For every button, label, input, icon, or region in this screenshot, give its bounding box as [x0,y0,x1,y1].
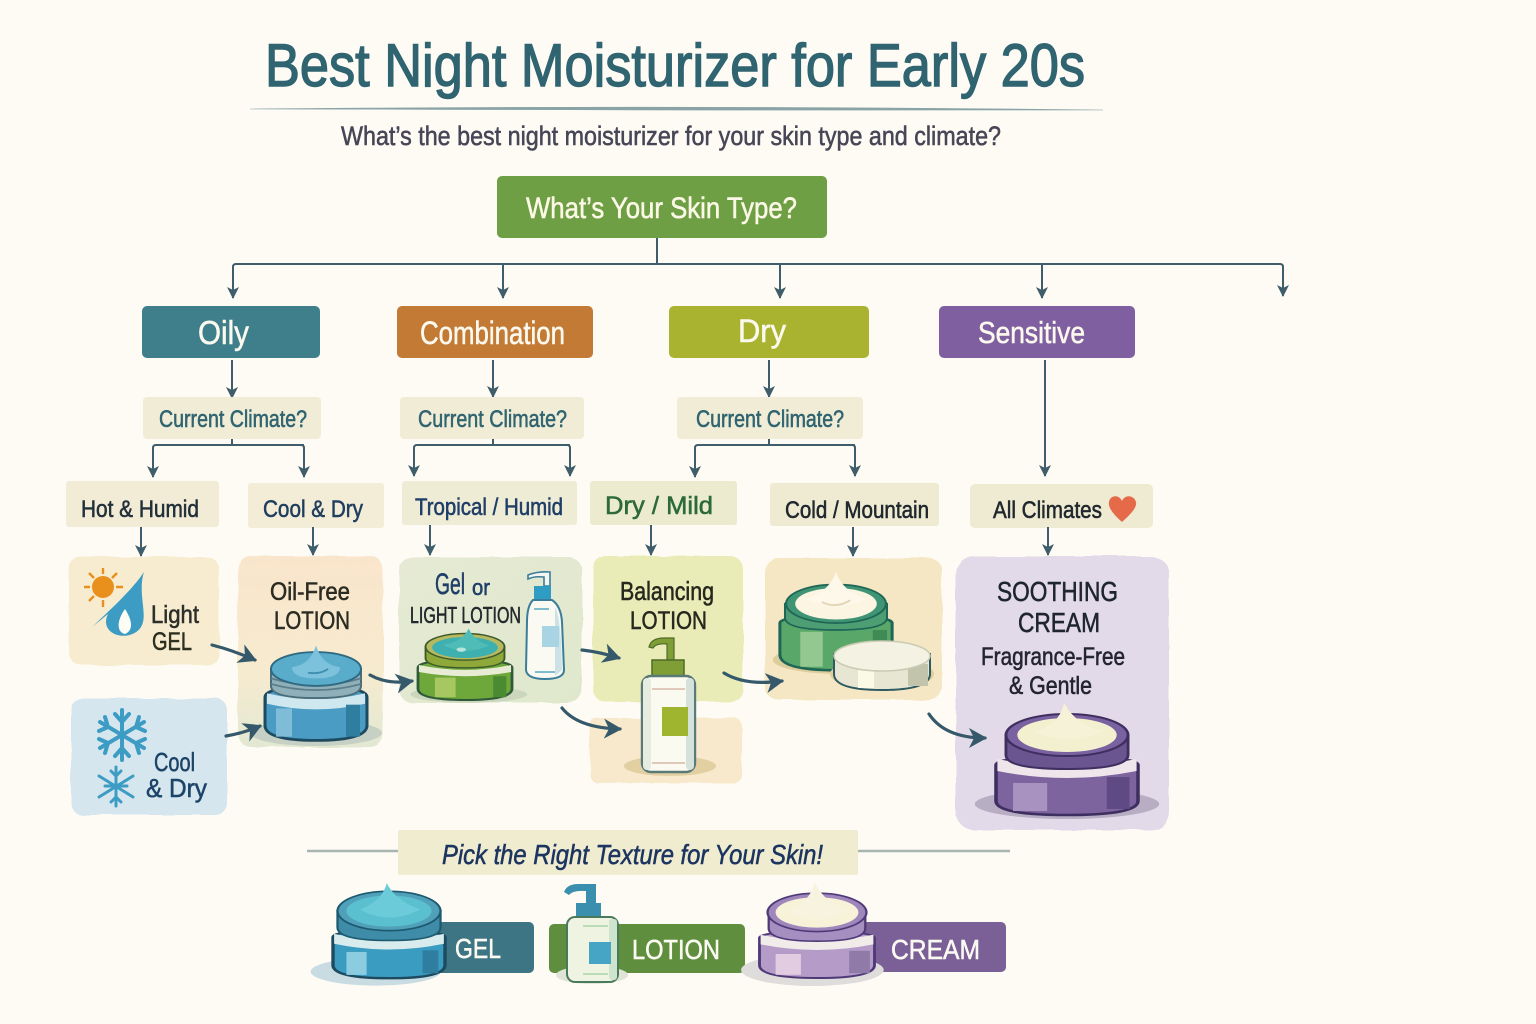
climate: All Climates [970,484,1153,528]
climate: Dry / Mild: Dry / Mild [605,492,713,520]
icon: large snowflake [99,710,145,760]
skin type: Sensitive: Sensitive [978,315,1085,350]
panel: Light Gel: Light [151,601,199,629]
texture section heading: Pick the Right Texture for Your Skin! [442,839,823,870]
panel: Gel or Light Lotion: Gel [435,568,465,601]
icon: sun [84,568,123,607]
climate: Tropical / Humid: Tropical / Humid [415,494,563,521]
panel: Soothing Cream [956,556,1169,830]
icon: purple jar [975,703,1159,819]
icon: green cream jar [773,572,899,674]
panel: Gel or Light Lotion: LIGHT LOTION [410,602,521,628]
root question box [497,176,827,238]
icon: water drop [92,572,144,636]
panel: Balancing Lotion: Balancing [620,576,714,606]
skin type: Oily [142,306,320,358]
icon: blue jar [250,645,382,746]
connectors to product panels [141,525,1048,556]
legend: CREAM: CREAM [891,934,980,965]
panel: Gel or Light Lotion: or [472,575,490,600]
panel: Soothing Cream: SOOTHING [997,576,1118,607]
question: Current Climate (dry) [677,397,863,439]
icon: green jar [410,629,527,703]
panel: Gel or Light Lotion [399,557,582,703]
question: Current Climate (dry): Current Climate? [696,406,844,433]
panel: Cold / Mountain cream [765,558,942,700]
legend: LOTION [549,884,745,984]
panel: lotion base [590,718,742,783]
panel: Soothing Cream: & Gentle [1009,672,1092,700]
subtitle: What’s the best night moisturizer for your skin type and climate? [341,121,1001,151]
panel: Soothing Cream: CREAM [1018,607,1100,638]
panel: Cool & Dry icons [71,698,227,815]
skin type: Oily: Oily [198,314,249,351]
panel: Soothing Cream: Fragrance-Free [981,643,1125,671]
legend: CREAM [741,882,1006,986]
panel: Balancing Lotion: LOTION [630,607,707,635]
root connector arrows [233,238,1283,298]
climate: Dry / Mild [590,481,737,525]
question: Current Climate (combination) [400,397,584,439]
texture section heading [307,830,1010,875]
climate: Cold / Mountain [770,483,939,526]
skin type: Sensitive [939,306,1135,358]
skin type: Combination: Combination [420,315,565,351]
legend: LOTION: LOTION [632,934,720,965]
climate: Cool & Dry: Cool & Dry [263,496,363,523]
connectors to climate questions [232,360,1045,476]
panel: Oil-Free Lotion: LOTION [274,607,350,635]
climate: Tropical / Humid [402,481,577,525]
skin type: Combination [397,306,593,358]
legend: GEL: GEL [455,933,501,964]
climate: Hot & Humid [66,481,219,527]
panel: Balancing Lotion [593,556,743,702]
icon: cream jar [741,882,884,986]
icon: balancing bottle [624,638,716,776]
climate: Hot & Humid: Hot & Humid [81,496,199,523]
panel: Cool & Dry icons: Cool [154,747,195,777]
question: Current Climate (combination): Current Climate? [418,406,567,433]
climate branch connectors [153,439,855,477]
icon: lotion bottle [526,572,564,679]
icon: lotion bottle [556,884,628,984]
climate: Cool & Dry [248,483,384,528]
panel: Light Gel [69,557,219,665]
climate: All Climates: All Climates [993,497,1102,524]
icon: heart [1109,496,1136,522]
climate: Cold / Mountain: Cold / Mountain [785,497,929,524]
panel: Light Gel: GEL [152,628,192,656]
icon: small snowflake [99,767,133,806]
legend: GEL [311,883,534,986]
question: Current Climate (oily) [143,397,321,439]
panel: Cool & Dry icons: & Dry [146,773,207,803]
icon: jar lid [830,641,934,690]
panel: Oil-Free Lotion: Oil-Free [270,578,350,606]
curved arrows between panels [212,645,985,738]
skin type: Dry [669,306,869,358]
icon: gel jar [311,883,445,986]
skin type: Dry: Dry [738,313,786,349]
panel: Oil-Free Lotion [238,556,383,747]
root question box: What’s Your Skin Type? [526,192,797,225]
title: Best Night Moisturizer for Early 20s [265,32,1085,99]
question: Current Climate (oily): Current Climate? [159,406,307,433]
